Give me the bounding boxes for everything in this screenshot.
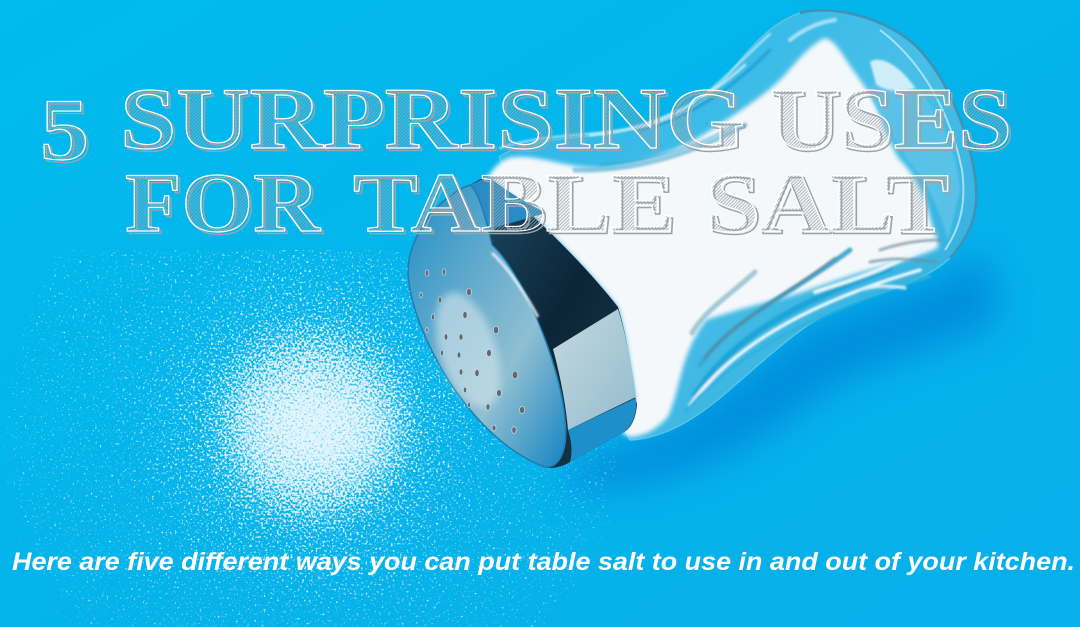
salt fill xyxy=(488,38,938,437)
title shadow: FOR xyxy=(128,158,324,252)
title hatched letters: 5 xyxy=(40,82,89,179)
spilled salt pile and scattered grains xyxy=(0,250,640,627)
title shadow: SALT xyxy=(708,158,952,252)
title shadow xyxy=(42,74,1014,252)
shaker shadow xyxy=(560,250,1000,490)
glass rim inner xyxy=(880,30,963,250)
cap band blue top xyxy=(468,177,546,234)
cap holes xyxy=(420,269,525,433)
title hatched letters xyxy=(40,71,1012,250)
title hatched letters: TABLE xyxy=(353,156,675,250)
salt dust on cap xyxy=(423,284,513,416)
title shadow: USES xyxy=(772,74,1014,170)
glass rim highlight xyxy=(800,10,976,258)
title shadow: 5 xyxy=(42,84,92,182)
title shadow: SURPRISING xyxy=(122,74,748,170)
title xyxy=(40,71,1014,252)
cap highlight xyxy=(492,253,538,317)
cap face xyxy=(408,185,566,467)
icon: salt shaker xyxy=(408,10,976,468)
salt pile soft core xyxy=(248,382,388,478)
title hatched letters: USES xyxy=(770,71,1012,168)
glass pale highlight xyxy=(870,60,915,91)
neck streaks xyxy=(500,20,835,170)
cap band lower edge xyxy=(568,398,636,462)
lower glass streaks xyxy=(685,240,940,412)
cap outer band base xyxy=(470,177,637,468)
subtitle: Here are five different ways you can put table salt to use in and out of your kitchen. xyxy=(12,548,1075,576)
glass clear patch at base xyxy=(868,77,960,240)
glass body xyxy=(499,10,976,440)
title shadow: TABLE xyxy=(356,158,678,252)
title hatched letters: SURPRISING xyxy=(120,71,745,168)
cap band reflection xyxy=(553,309,636,430)
title hatched letters: SALT xyxy=(706,156,949,250)
title hatched letters: FOR xyxy=(125,156,322,250)
